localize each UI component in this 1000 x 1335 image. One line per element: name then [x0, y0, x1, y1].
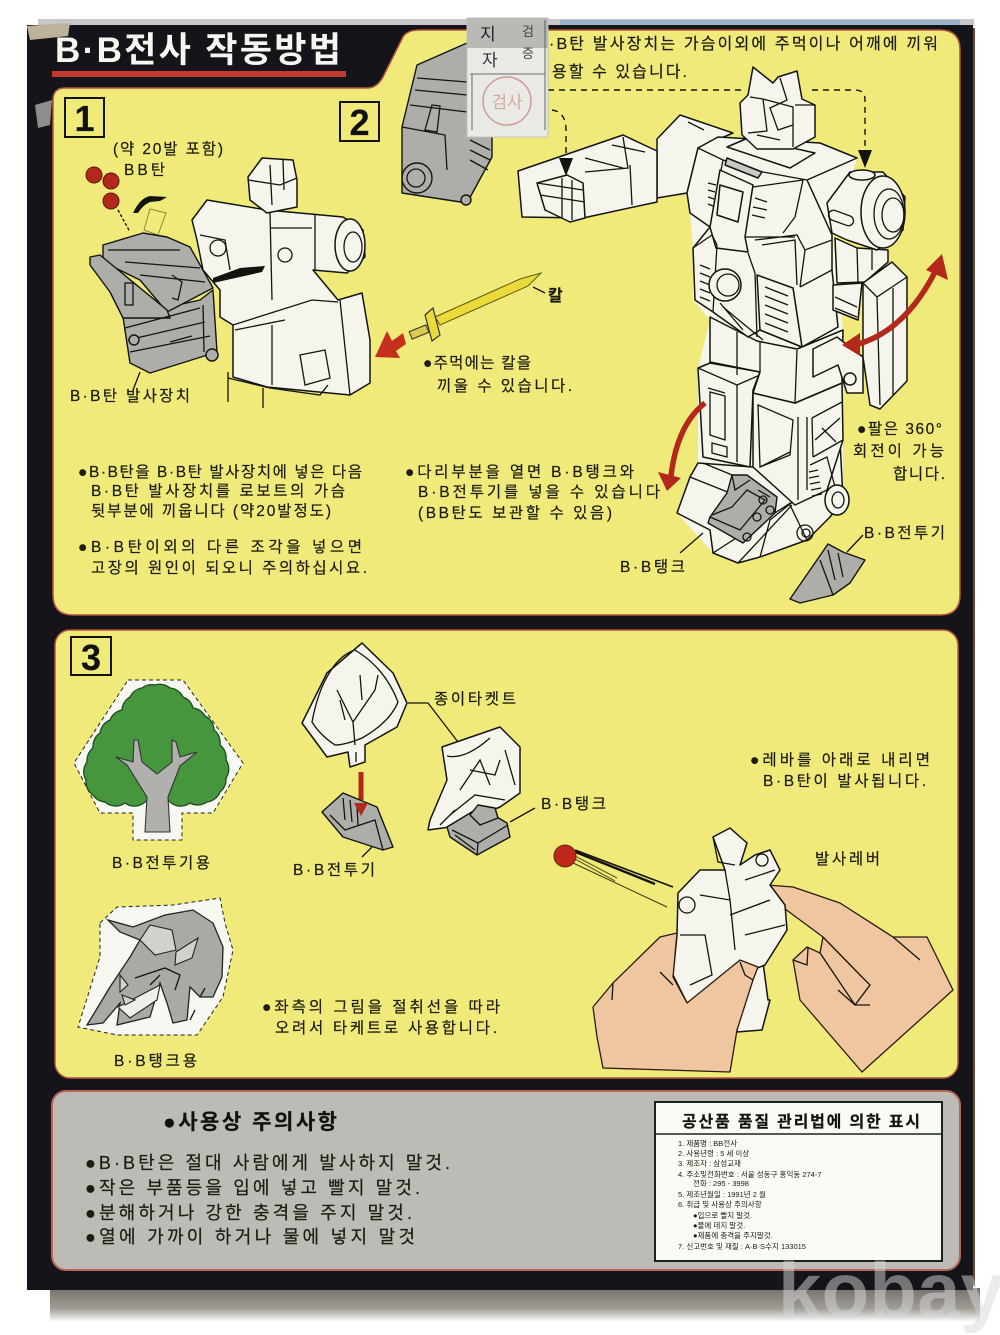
callout: launcher usage text: ·B탄 발사장치는 가슴이외에 주먹이나 어깨에 끼워	[549, 35, 938, 53]
text block: loading instructions: ●B·B탄이외의 다른 조각을 넣으면	[78, 538, 362, 556]
callout: cut out text: ●좌측의 그림을 절취선을 따라	[262, 998, 500, 1016]
robot hips	[710, 317, 843, 403]
label: launcher: B·B탄 발사장치	[70, 387, 190, 405]
text block: leg storage: ●다리부분을 열면 B·B탱크와	[405, 463, 634, 481]
robot head	[740, 67, 815, 149]
sticker: inspection seal: 검	[522, 24, 534, 39]
robot fist	[537, 175, 585, 222]
callout line: paper ticket	[408, 703, 458, 742]
callout: firing text	[750, 751, 930, 790]
text block: cautions list: ●B·B탄은 절대 사람에게 발사하지 말것.	[85, 1153, 450, 1173]
step number 1	[65, 98, 104, 139]
label: quality control notice: 7. 신고번호 및 재질 : A·B·S수지 133015	[678, 1241, 806, 1251]
callout: sword text: ●주먹에는 칼을	[423, 354, 531, 372]
right hand	[767, 885, 953, 1072]
callout: cut out text: 오려서 타케트로 사용합니다.	[275, 1019, 497, 1037]
label: quality control notice: 공산품 품질 관리법에 의한 표시	[682, 1113, 920, 1131]
label: BB tank step 3: B·B탱크	[541, 795, 606, 813]
text block: loading instructions: 고장의 원인이 되오니 주의하십시요.	[91, 559, 367, 577]
sticker: inspection seal: 지	[480, 25, 496, 44]
robot right upper arm	[835, 238, 888, 283]
label: paper ticket: 종이타켓트	[434, 690, 516, 708]
illustration: fighter with ticket slot	[322, 793, 393, 857]
label: BB pellets count: (약 20발 포함)	[113, 140, 223, 158]
label: firing lever: 발사레버	[815, 850, 880, 868]
panel: steps 1 and 2	[53, 30, 960, 615]
robot upper arm	[657, 115, 733, 198]
label: sword: 칼	[548, 287, 563, 305]
label: quality control notice: 2. 사용년령 : 5 세 이상	[678, 1148, 749, 1158]
heading: cautions: ●사용상 주의사항	[163, 1111, 337, 1134]
robot left leg	[698, 363, 760, 467]
illustration: fired pellet trail	[554, 845, 673, 907]
lower robot leg behind hand	[737, 955, 770, 1032]
text block: loading instructions: B·B탄 발사장치를 로보트의 가슴	[91, 482, 345, 500]
panel: step 3	[55, 630, 958, 1078]
text block: loading instructions	[78, 463, 367, 577]
robot silhouette fill	[677, 148, 857, 563]
label: BB pellets: BB탄	[124, 161, 165, 179]
callout: cut out text	[262, 998, 500, 1037]
label: fighter target: B·B전투기용	[112, 854, 210, 872]
label: tank target: B·B탱크용	[114, 1052, 197, 1070]
robot right shoulder	[827, 172, 905, 250]
robot right leg	[753, 383, 843, 505]
label: quality control notice: ●물에 데지 말것.	[693, 1220, 745, 1230]
callout: arm rotation text	[853, 420, 945, 483]
illustration: sword	[409, 273, 545, 341]
arrow: arm rotation	[842, 254, 948, 356]
label: BB tank: B·B탱크	[620, 558, 685, 576]
arrow: ticket into fighter	[358, 772, 364, 800]
callout: arm rotation text: 회전이 가능	[853, 442, 944, 460]
illustration: tree ticket on fighter	[302, 643, 407, 767]
box shadow	[50, 1288, 980, 1322]
title: B·B전사 작동방법	[55, 31, 341, 70]
label: quality control notice: 1. 제품명 : BB전사	[678, 1138, 737, 1148]
callout: launcher usage text	[549, 35, 938, 81]
arrow: leg opening	[658, 403, 705, 491]
illustration: hand holding robot and firing	[593, 828, 953, 1072]
illustration: robot with launcher	[192, 158, 370, 408]
callout: launcher usage text: 용할 수 있습니다.	[552, 63, 687, 81]
callout: arm rotation text: 합니다.	[893, 465, 945, 483]
illustration: launcher on fist (rear view)	[402, 43, 492, 205]
callout: arm rotation text: ●팔은 360°	[857, 420, 942, 438]
arrow: dashed line to fist	[552, 110, 573, 176]
text block: leg storage	[405, 463, 660, 522]
text block: cautions list	[85, 1153, 450, 1247]
icon: red BB pellets	[86, 167, 119, 209]
label: fighter: B·B전투기	[293, 861, 375, 879]
label: quality control notice: 5. 제조년월일 : 1991년 2 월	[678, 1189, 766, 1199]
callout: sword text: 끼울 수 있습니다.	[437, 377, 572, 395]
label: quality control notice: 전화 : 295 - 3998	[693, 1178, 749, 1188]
robot foot	[677, 440, 843, 563]
robot lower wheels	[825, 485, 849, 515]
label: BB fighter: B·B전투기	[864, 524, 945, 542]
robot forearm	[518, 135, 657, 218]
illustration: BB launcher	[90, 233, 218, 390]
text block: cautions list: ●분해하거나 강한 충격을 주지 말것.	[85, 1203, 412, 1223]
small robot body	[673, 828, 787, 1005]
callout: sword text	[423, 354, 572, 395]
sticker: inspection seal: 자	[482, 51, 498, 70]
watermark: kobay	[778, 1246, 1000, 1334]
robot torso	[687, 137, 857, 347]
callout: firing text: ●레바를 아래로 내리면	[750, 751, 930, 769]
arrow: sword into fist	[375, 331, 406, 358]
illustration: tree target cutout	[74, 680, 243, 840]
label: quality control notice: ●입으로 빨지 말것.	[693, 1210, 752, 1220]
text block: cautions list: ●작은 부품등을 입에 넣고 빨지 말것.	[85, 1178, 420, 1198]
text block: loading instructions: 뒷부분에 끼웁니다 (약20발정도)	[91, 502, 331, 520]
sticker: inspection seal: 증	[522, 46, 534, 61]
arrow: load pellets	[118, 196, 167, 235]
step number 1: 1	[74, 98, 95, 139]
step number 2	[340, 102, 379, 143]
label: quality control notice	[655, 1102, 942, 1261]
sticker: inspection seal	[467, 18, 548, 137]
illustration: BB fighter	[790, 535, 865, 603]
illustration: large robot	[518, 67, 907, 563]
illustration: dinosaur target cutout	[78, 898, 233, 1035]
label: quality control notice: 3. 제조자 : 삼성교재	[678, 1158, 741, 1168]
label: quality control notice: ●제품에 충격을 주지말것.	[693, 1230, 773, 1240]
text block: loading instructions: ●B·B탄을 B·B탄 발사장치에 넣은 다음	[78, 463, 362, 481]
step number 2: 2	[349, 102, 370, 143]
step number 3: 3	[81, 637, 101, 678]
sticker: inspection seal: 검사	[491, 93, 523, 112]
panel: cautions	[52, 1091, 960, 1270]
label: quality control notice: 6. 취급 및 사용상 주의사항	[678, 1199, 762, 1209]
arrow: dashed line to shoulder	[548, 90, 872, 168]
callout: firing text: B·B탄이 발사됩니다.	[763, 772, 926, 790]
robot right forearm block	[863, 262, 907, 409]
illustration: dino ticket on tank	[428, 727, 535, 855]
left hand	[593, 933, 758, 1072]
label: quality control notice: 4. 주소및전화번호 : 서울 성동구 홍익동 274-7	[678, 1169, 822, 1179]
text block: cautions list: ●열에 가까이 하거나 물에 넣지 말것	[85, 1227, 415, 1247]
illustration: BB tank on foot	[680, 475, 777, 553]
text block: leg storage: (BB탄도 보관할 수 있음)	[418, 504, 612, 522]
text block: leg storage: B·B전투기를 넣을 수 있습니다	[418, 483, 660, 501]
step number 3	[71, 637, 111, 678]
